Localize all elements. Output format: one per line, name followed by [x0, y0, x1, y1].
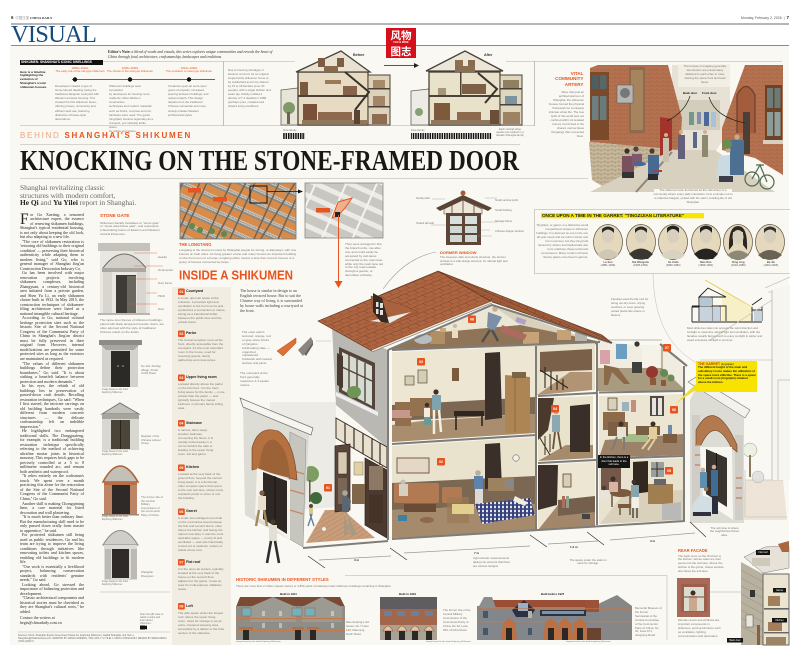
article body: Go has been involved with major renovation projects involving shikumen complexes, including Zhangyuan, a century-old historical area initiated from a private garden, and Shen Yu Li, an early shikumen cluster built in 1932. In May 2015, the construction techniques of shikumen-filing architecture were listed as a national intangible cultural heritage. [20, 270, 84, 316]
dimension 1.3 m: 1.3 m [570, 544, 578, 548]
staircase column upper [537, 342, 595, 395]
article body: "The values of different shikumen buildings define their protection boundaries," Go said. "It is about striking a heartfelt balance between protection and modern demands." [20, 361, 84, 384]
middle stair landing room 04 [538, 396, 593, 461]
timeline [72, 77, 215, 82]
room key: upper living room: Upper living room [186, 375, 217, 379]
sun diagram text: Most shikumen take into account the wind direction and sunlight to maximize natural light and ventilation, with the facades usually facing south to enjoy sunlight in winter and avoid excessive sunlight in summer. [687, 326, 762, 342]
historic building 1 [236, 597, 345, 640]
writer names: Dai Wangshu [632, 260, 649, 264]
arrow before to after [384, 63, 419, 68]
dimension 3 m: 3 m [354, 558, 359, 562]
flat roof terrace [598, 340, 687, 391]
era 2 heading: 1900s-1930s [122, 66, 138, 70]
article body: "Our work is essentially a livelihood project, balancing conservation standards with residents' genuine needs," Go said. [20, 564, 84, 582]
built before 1927: Built before 1927 [541, 592, 564, 596]
article body: "It relies entirely on the craftsman's touch. We spent over a month practicing this alone for the restoration of the Site of the Second National Congress of the Communist Party of China," Go said. [20, 473, 84, 501]
rear building labels: Flat roof [758, 550, 768, 554]
era 1 text: offering privacy, community and [55, 104, 96, 108]
masthead left: 6 中国日报 CHINA DAILY [11, 14, 52, 20]
era 1 text: traditional Jiangnan courtyard with [55, 92, 99, 96]
room key: flat roof: Flat roof [186, 560, 200, 564]
room key: parlor: Parlor [186, 331, 196, 335]
article body: For protected shikumen still being used as public residences, Go and his team are trying to improve the living conditions through initiatives like renovating toilets and kitchen spaces, enabling old buildings to fit modern life. [20, 532, 84, 564]
gate part labels: Door [158, 306, 164, 310]
roof [318, 271, 492, 351]
built in 1919: Built in 1919 [399, 592, 416, 596]
scale bars [283, 133, 492, 139]
rear facade text: The back room on the first floor is the kitchen, whose water-ice door opens into the sub lane. Above the kitchen is the garret, whose window also faces the sub lane. [678, 554, 724, 573]
room key: courtyard: A small, open-air space at the entrance. It provides light and ventilation to the front rooms and symbolizes a connection to nature, acting as a transitional buffer between the public lane and the private home. [178, 296, 226, 324]
alley bottom note: The shikumen lane functioned as the vital artery of a community where every daily interaction, from a simple nod to a collective bargain, pulsed with the warm, bustling life of old Shanghai. [653, 188, 733, 204]
walking figures [256, 490, 279, 563]
historic building 3 [477, 595, 632, 640]
house intro: The house is similar in design to an English terraced house. But to suit the Chinese way of living, it is surrounded by house walls including a courtyard at the front. [240, 288, 303, 313]
section title VISUAL: VISUAL [11, 21, 96, 48]
structural frame [303, 305, 685, 548]
writer names: Ding Ling [732, 260, 745, 264]
parlor room [392, 437, 535, 538]
era 2 text: for artists and writers. [109, 129, 137, 133]
building credits [236, 640, 611, 643]
era 2 text: such as bricks, concrete and iron [109, 109, 151, 113]
article body [20, 210, 84, 614]
newspaper logo: 风物 [390, 28, 412, 43]
after label: After [484, 52, 492, 56]
era 2 text: hardware were used. The garret [109, 113, 150, 117]
vital community artery heading: VITAL [571, 71, 584, 76]
writer names: (1904-2005) [764, 264, 778, 267]
historic heading: HISTORIC SHIKUMEN IN DIFFERENT STYLES [236, 576, 329, 582]
stone gate heading: STONE GATE [100, 213, 129, 218]
room key: garret: Garret [186, 509, 197, 513]
era 2 text: cramped, yet culturally fertile space [109, 121, 146, 129]
room key: upper living room: Located directly above the parlor on the first floor. It is the main living space for the family — more private than the parlor — and typically houses the master bedroom or primary family sitting area. [178, 382, 225, 410]
dimension 3 m rear: 3 m [650, 539, 655, 543]
sidebar tags: 05 [179, 466, 183, 470]
contact: Contact the writers at [20, 615, 55, 620]
rear garret label: Garret [776, 588, 783, 592]
stone gate 2 [99, 340, 142, 387]
lane arrangement note: They were arranged in fine the branch units, row after row, and could easily be accessed by sub-lanes connected to the main lane, while only the main lane led to the city road outside through a guoluo, or decorative archway. [345, 242, 383, 277]
rear facade window [677, 578, 750, 617]
era 2 text: techniques and modern materials [109, 104, 152, 108]
subhead: Shanghai revitalizing classic [20, 183, 105, 192]
era 3 text: It features open-air semi-open [168, 84, 207, 88]
sidebar tags [178, 288, 185, 610]
number tags: 01 [326, 486, 330, 490]
stone gate 1: lintel sketch [98, 243, 150, 315]
dormer labels left: Small purlin [416, 197, 430, 200]
courtyard plants [303, 466, 322, 504]
dormer labels right: Small vertical purlin [495, 199, 518, 202]
room key: loft: Loft [186, 604, 193, 608]
room key: kitchen: Kitchen [186, 465, 199, 469]
era 3 text: reduced depth. This design [168, 96, 203, 100]
timeline intro: Here is a timeline highlighting the evolution of Shanghai's iconic shikumen houses. [20, 70, 47, 89]
gate part labels: Door frame [158, 280, 172, 284]
era 2 heading [106, 66, 153, 73]
back door label: Back door [683, 91, 697, 95]
article body: In his eyes, the rebirth of old buildings lies in preservation of passed-down craft details. Recalling restoration techniques, Go said: "When I first started, the intricate carvings on old building handrails were vastly different from modern concrete structures — the delicate craftsmanship left an indelible impression." [20, 383, 84, 429]
flat roof note: Families used the flat roof for doing out-dry items, drying sundries, or even growing potted plants like ottens or flowers. [611, 297, 648, 317]
rear kitchen label: Kitchen [775, 618, 784, 622]
gate 3 caption: Register of the Chinese Labour Group [141, 434, 161, 445]
era 3 heading [166, 66, 212, 73]
longtang text: Longtang is the local term used by Shanghai people for strong, or alleyways, with row houses on both sides. As living greater a lane and many houses an important building on the front room of a house, longtang either means a lane that connect houses or a group of houses connected by lanes. [179, 248, 296, 264]
room key: garret: A small, low-ceilinged room built on the mezzanine level between the first and second floors, often above the kitchen and facing the narrow rear alley. It was the most desirable space — poorly lit and ventilated — and was historically rented out to students, writers or artists at low cost. [178, 516, 223, 552]
number tags: 07 [665, 346, 669, 350]
stone gate 5 [103, 530, 138, 580]
gate 5 credit: Image based on the book Exploring Shikumen [102, 581, 128, 586]
tile samples [277, 337, 331, 356]
era 2 heading: The climax of the old-type shikumen [107, 69, 153, 73]
timeline heading: SHIKUMEN: SHANGHAI'S ICONIC DWELLINGS [21, 60, 92, 64]
garret literature text: Tingzijian, or garret, is a distinctive small compartment unique to shikumen buildings. It is damned as one to the sun all year round and ice-cold in winter and hot in summer, but they long held favored by writers and intellectuals due to its relatively cheap rental and convenience. Many modern Chinese literary giants once lived in garrets. [536, 223, 588, 259]
portraits [594, 224, 784, 260]
writer names: (1881-1936) [601, 264, 615, 267]
sub lane note: The sub lane is where the neighborhood lives alive. [710, 526, 739, 537]
writer names: Mao Dun [700, 260, 711, 264]
building 1 caption: Mao Zedong's old house, No 7 Lane 120, Maoming North Road [346, 620, 369, 636]
source line: Sources: 33 Art, Shanghai Jing'an Government Planet Art, Exploring Shikumen, Capital Shanghai, and Yao Li, Hangzhou@thinkbusiness.com. GRAPHIC BY JIANG FUNFENG, YAN LIXIA / YU YILEI, LI WAN / CHINA DAILY DESIGN BY WANG MING / YANG QINGYI [18, 634, 167, 643]
article body: He highlighted two endangered traditional skills. The Dongguafeng, for example, is a traditional building restoration technique specifically referring to the method of achieving ultrafine mortar joints in historical masonry. This requires brick gaps to be precisely controlled at a 5 to 8 millimeter rounded arc, and remain both aesthetic and waterproof. [20, 428, 84, 474]
artery text: More than just an architectural icon of Shanghai, the shikumen houses formed the physical framework for a uniquely intimate urban life. The true spirit of this world was not confined within its isolated homes, but thrived in the shared, narrow lanes (longtang) that connected them. [549, 90, 584, 138]
era 1 text [55, 84, 99, 121]
header rules [11, 24, 789, 46]
writer names: (1904-1986) [731, 264, 746, 267]
article body: F [20, 210, 29, 228]
era 3 text: architectural styles. [168, 113, 193, 117]
measurement note: Approximate measurements taking into account that there are various designs [473, 556, 510, 568]
number tags: 08 [470, 318, 474, 322]
inside a shikumen heading: INSIDE A SHIKUMEN [179, 268, 293, 282]
era 1 heading: The early era of the old-type shikumen [55, 69, 105, 73]
era 3 text: spacing between buildings, and [168, 92, 208, 96]
orange arrow from lane to house [334, 215, 342, 288]
sidebar tags: 03 [179, 376, 183, 380]
dormer on roof [370, 293, 418, 323]
era 2 text: residents. More Western construction [109, 96, 140, 104]
room key: parlor: The formal reception room at the front, directly accessible from the courtyard. It's the most important room in the house, used for receiving guests, family gatherings and ceremonies. [178, 338, 223, 362]
rear back door label: Back door [729, 638, 741, 642]
garret callout text: THE GARRET (tingzijian) [698, 362, 734, 366]
era 1 heading [55, 66, 105, 73]
room key: flat roof: It is the open-air terrace, typically located at the very back of the house on the second floor, adjacent to the garret. It was an area for multi-purpose utilitarian space. [178, 566, 223, 590]
stone gate intro: Shikumen literally translates to "stone gate" or "stone warehouse gate", and represents a fascinating fusion of Eastern and Western cultural influences. [100, 220, 160, 236]
era 1 heading: 1860s-1910s [72, 66, 88, 70]
front door label: Front door [702, 91, 717, 95]
scale label many: Five-family [411, 128, 425, 132]
article body: "The core of shikumen restoration is 'restoring old buildings to their original condition' — preserving their historical authenticity while adapting them to modern living," said Go, who is general manager of Shanghai Jing'an Construction Decoration Industry Co. [20, 239, 84, 271]
subhead: He Qi and Yu Yilei report in Shanghai. [20, 198, 136, 207]
front gate wall [243, 405, 309, 547]
gate part labels: Plinth [158, 294, 165, 298]
era 3 heading: 1910s-1930s [181, 66, 197, 70]
sidebar tags: 08 [179, 604, 183, 608]
era 2 text: Shikumen buildings were remodeled [109, 84, 141, 92]
built in 1911: Built in 1911 [280, 592, 297, 596]
illustration: house before [281, 51, 390, 125]
courtyard figures [308, 490, 357, 535]
era 3 text [168, 84, 208, 117]
number tags: 04 [553, 407, 557, 411]
gate wall facing sub lane [688, 377, 750, 523]
upper front wall [332, 326, 388, 448]
era 1 text: Developers created a type of [55, 84, 92, 88]
illustration: house after [411, 51, 522, 125]
room key: loft: The attic space under the sloped roof, above the upper living room. Used for storage or as an extra, cramped sleeping area, accessible by a ladder or the final section of the staircase. [178, 610, 224, 634]
building credits: Image based on the book Exploring Shikumen [426, 641, 471, 643]
writer names: Ba Jin [767, 260, 775, 264]
courtyard back wall [270, 402, 336, 510]
illustration: dormer window [436, 190, 492, 245]
stone gate arch [252, 430, 297, 480]
kitchen black label [598, 455, 630, 468]
garret room [599, 394, 683, 458]
building 2 caption: The former site of the Central Military Commission of the Communist Party of China, No 32, Lane 653, Orzzha Road [443, 608, 470, 632]
article body: Another skill is making Chongqiming lime, a core material for listed decoration and wall plastering. [20, 500, 84, 515]
gate 4 credit: Image based on the book Exploring Shikumen [102, 516, 128, 521]
era 3 text: Chinese vernacular and more [168, 104, 206, 108]
sidebar tags: 01 [179, 290, 183, 294]
dormer labels left 2: Scaled tall wall [416, 222, 434, 225]
historic subheading: There are more than 2 million square meters or 1,800 yards of relatively intact shikumen buildings remaining in Shanghai. [236, 584, 391, 588]
stone gate 4 [102, 466, 139, 516]
newspaper logo: 图志 [390, 44, 412, 59]
era 1 text: decorations. [55, 117, 71, 121]
stairs note: The space under the stairs is used for storage. [569, 558, 607, 565]
gate leader lines [131, 253, 163, 304]
timeline heading [20, 60, 103, 64]
room key: staircase: Staircase [186, 420, 202, 424]
era 3 text: green courtyards, increased [168, 88, 204, 92]
illustration: vital community artery alley [589, 64, 783, 201]
number tags: 02 [439, 460, 443, 464]
vital community artery heading: COMMUNITY [555, 76, 584, 81]
newspaper logo [386, 28, 416, 59]
gate part labels: Ornamental [158, 268, 173, 272]
rear facade lower text: Wooden doors and windows are important components in shikumen, serving functions such as ventilation, lighting, communication and decoration. [678, 618, 721, 638]
upper window [336, 347, 378, 416]
leader curve [653, 273, 697, 363]
era 2 text: (tingzijian) became legendary as a [109, 117, 153, 121]
number tags: 06 [672, 408, 676, 412]
longtang heading: THE LONGTANG [179, 242, 211, 246]
era 3 text: departs from the traditional [168, 100, 202, 104]
dimension lines [308, 522, 706, 568]
dormer leader lines [383, 198, 497, 289]
gate description: The stone door frames of shikumen buildings, paired with black lacquered wooden doors, are often adorned with the style of traditional Chinese reliefs on the lintels. [100, 318, 164, 334]
panel: once upon a time in the garret [534, 210, 790, 274]
dormer labels right: Storage frame [495, 220, 512, 223]
building credits: Image based on the book Exploring Shikumen [566, 641, 611, 643]
garret callout text: The different height of the main and subsidiary rooms makes the utilization of the space more effective. There is a space for a small room (tingzijian) situated above the kitchen. [698, 365, 756, 384]
gate part labels: Header [158, 254, 167, 258]
sidebar tags: 02 [179, 332, 183, 336]
room key: courtyard: Courtyard [186, 288, 203, 292]
once upon heading: ONCE UPON A TIME IN THE GARRET: "TINGZIJIAN LITERATURE" [542, 212, 684, 218]
gate 3 credit: Image based on the book Exploring Shikumen [102, 451, 128, 456]
sidebar tags: 04 [179, 422, 183, 426]
era 1 text: distinctive Chinese-style [55, 113, 86, 117]
dormer labels right [495, 199, 524, 233]
kitchen room [599, 458, 683, 524]
kicker: behind Shanghai's shikumen: BEHIND SHANGHAI'S SHIKUMEN [20, 131, 192, 140]
building credits: Image based on the book Exploring Shikumen [236, 641, 281, 643]
attic room [390, 305, 597, 350]
article body: "Classic architectural components and historical stories must be cherished as they are Shanghai's cultural roots," he added. [20, 595, 84, 614]
yellow garret callout [696, 361, 757, 392]
dormer text: The steepest, dark and sturdy structure, the dormer window is a vital design element, for natural light and ventilation. [440, 255, 508, 266]
newspaper logo: FAR & WIDE [393, 40, 409, 44]
subhead: structures with modern comfort, [20, 191, 115, 200]
number tags: 03 [419, 360, 423, 364]
vital community artery heading: ARTERY [565, 82, 584, 87]
housing shortage note: Due to housing shortages, it became common for an original single-family shikumen home to be subdivided and to be shared by 15 to 18 families (over 20 people), with a single kitchen and water tap. Rubity entitled a density of 7.2 dwelled in 1958 (perhaps poor, crowded and chaotic living conditions. [228, 68, 271, 108]
dormer labels right: Chinese dragon window [495, 230, 524, 233]
video icon [140, 626, 147, 630]
editor's note: Editor's Note: a blend of words and visuals, this series explores unique communities and reveals the heart of China through food, architecture, craftsmanship, landscapes and traditions. [108, 50, 272, 59]
kitchen door label text: In the kitchen, there is a door that leads to the sub lane. [600, 456, 628, 466]
alley top note: The houses in longtang generally two-storied, are preservatory attached to each other in rows, sharing the same front and back lanes. [684, 64, 726, 84]
writer names: Xu Zuda [668, 260, 678, 264]
vital community artery heading [555, 71, 584, 87]
before label: Before [353, 52, 364, 56]
sidebar tags: 06 [179, 510, 183, 514]
gate 5 caption: Shanghai Divergcen [141, 570, 154, 578]
bottom store room [538, 462, 595, 530]
stone gate 3 [102, 403, 139, 450]
era 1 text: stone-framed dwelling fusing the [55, 88, 97, 92]
article body: "It is much better than ordinary lime. But the manufacturing skill used to be only passed down orally from master to apprentice," he said. [20, 514, 84, 533]
article body: or Go Xueting, a seasoned architecture expert, the essence of renewing shikumen buildings, Shanghai's typical residential housing, is not only about keeping the old look, but also adapting to a new life. [20, 212, 84, 239]
gate 4 caption: The former site of the Central Military Commission of the Communist Party of China [141, 495, 163, 516]
subhead [20, 183, 136, 207]
sun angle diagram [692, 280, 762, 322]
writer names: Lu Xun [603, 260, 613, 264]
writer names [600, 260, 778, 267]
era 2 text [109, 84, 153, 133]
contact: hegis@chinadaily.com.cn [20, 620, 62, 625]
masthead right: Monday, February 2, 2026 | 7 [741, 14, 789, 20]
number tags [324, 316, 678, 492]
era 3 text: closely imitates Western [168, 109, 199, 113]
building 3 caption: Memorial Museum of the former Secretariat of the Central Committee of the Communist Party of China, No 30, Lane 671, Jiangning Road [635, 606, 662, 637]
historic building 2 [380, 597, 437, 640]
article body: Looking ahead, Go stressed the importance of balancing protection and development. [20, 582, 84, 596]
era 2 text: by developers for housing more [109, 92, 150, 96]
courtyard plank floor [306, 510, 375, 543]
era 3 heading: The evolution to new-type shikumen [166, 69, 212, 73]
sidebar tags: 07 [179, 560, 183, 564]
room key: staircase: A narrow, often steep, wooden staircase connecting the floors. It is usually tucked away in a corner behind the café or leading to the upper living room, loft and garret. [178, 428, 213, 456]
scale label one: One-family [283, 128, 297, 132]
contact [20, 615, 62, 625]
yellow pointer [675, 381, 703, 404]
writer names: (1905-1950) [633, 264, 648, 267]
dormer labels right: Small thinking [495, 209, 512, 212]
rear building section [727, 541, 789, 645]
room key: kitchen: Located at the very back of the ground floor, beyond the central living areas. It is a functional, often compact space that opens to the rear sub lane, where many residents prefer to enter or exit the building. [178, 472, 223, 500]
scale note: Each vertical stripe equals one resident in a decade Shanghai family [496, 128, 524, 137]
enlarged lane view [268, 182, 384, 238]
gate part labels [158, 254, 173, 310]
gate 2 credit: Image based on the book Exploring Shikumen [102, 389, 128, 394]
pale rear lane building [700, 277, 790, 520]
illustration: shikumen cross-section house [98, 243, 789, 645]
dimension 7 m: 7 m [474, 550, 479, 554]
outer wall note: The outer wall is textured, orange, red or gray stone bricks of Qingshui brickmaking slate — organized, unplastered brickwork with natural surface and joints. [242, 330, 272, 365]
rear facade heading: REAR FACADE [678, 548, 708, 552]
sidebar tint [172, 287, 231, 645]
article body: According to Go, national cultural heritage protection sites such as the historic Site of the Second National Congress of the Communist Party of China in Shanghai's Jing'an district must be fully preserved in their original form. However, internal modifications are permitted for some protected sites as long as the exteriors are maintained as required. [20, 315, 84, 361]
scan note: Scan the QR code to watch a video and learn about shikumen. [140, 613, 163, 625]
aerial view of lanes [180, 182, 296, 240]
upper living room [392, 346, 535, 442]
courtyard size note: The courtyard at the front generally measures 2-3 square meters. [240, 371, 269, 387]
writer names: (1896-1981) [698, 264, 713, 267]
era 1 text: Western-terraced housing. This [55, 96, 95, 100]
era 1 text: efficient land use, featuring [55, 109, 90, 113]
writer names: (1890-1982) [666, 264, 681, 267]
entrance doors [335, 418, 388, 538]
dormer heading: DORMER WINDOW [440, 250, 476, 254]
era 1 text: created the first shikumen lanes, [55, 100, 97, 104]
gate 2 caption: No 142, Donlag village, Xin'an Jinzhi Road [141, 364, 160, 375]
number tags: 05 [667, 469, 671, 473]
